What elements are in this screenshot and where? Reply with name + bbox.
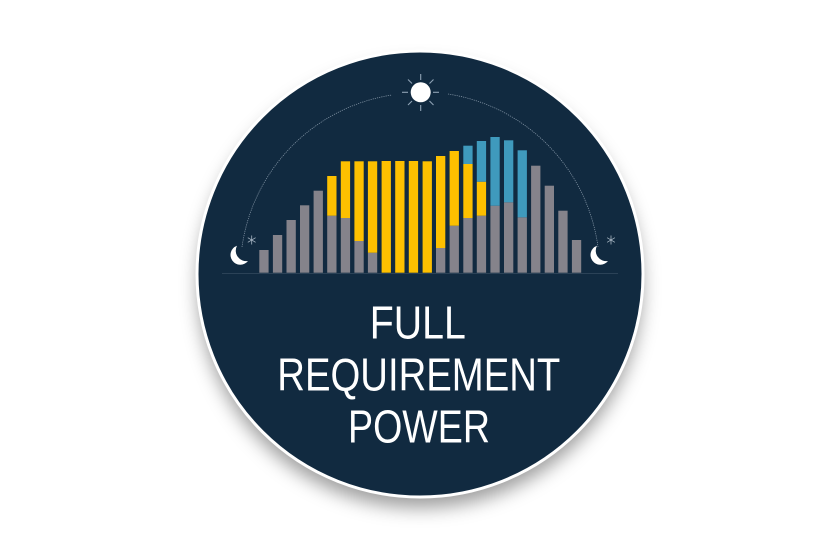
title: POWER <box>348 400 490 452</box>
blue bars <box>463 137 527 217</box>
icon: left moon <box>231 246 248 265</box>
baseline <box>222 272 618 274</box>
title <box>277 296 560 452</box>
icon: right moon <box>591 246 608 265</box>
badge circle <box>197 51 643 497</box>
icon: sun <box>402 74 439 111</box>
icon: left star <box>248 236 256 244</box>
stacked bar chart <box>259 137 581 273</box>
yellow bars <box>327 151 486 273</box>
title: FULL <box>370 296 466 348</box>
grey bars <box>259 166 581 273</box>
icon: right star <box>607 236 615 244</box>
day arc <box>242 94 598 247</box>
title: REQUIREMENT <box>277 348 560 400</box>
badge drop shadow <box>198 64 642 508</box>
